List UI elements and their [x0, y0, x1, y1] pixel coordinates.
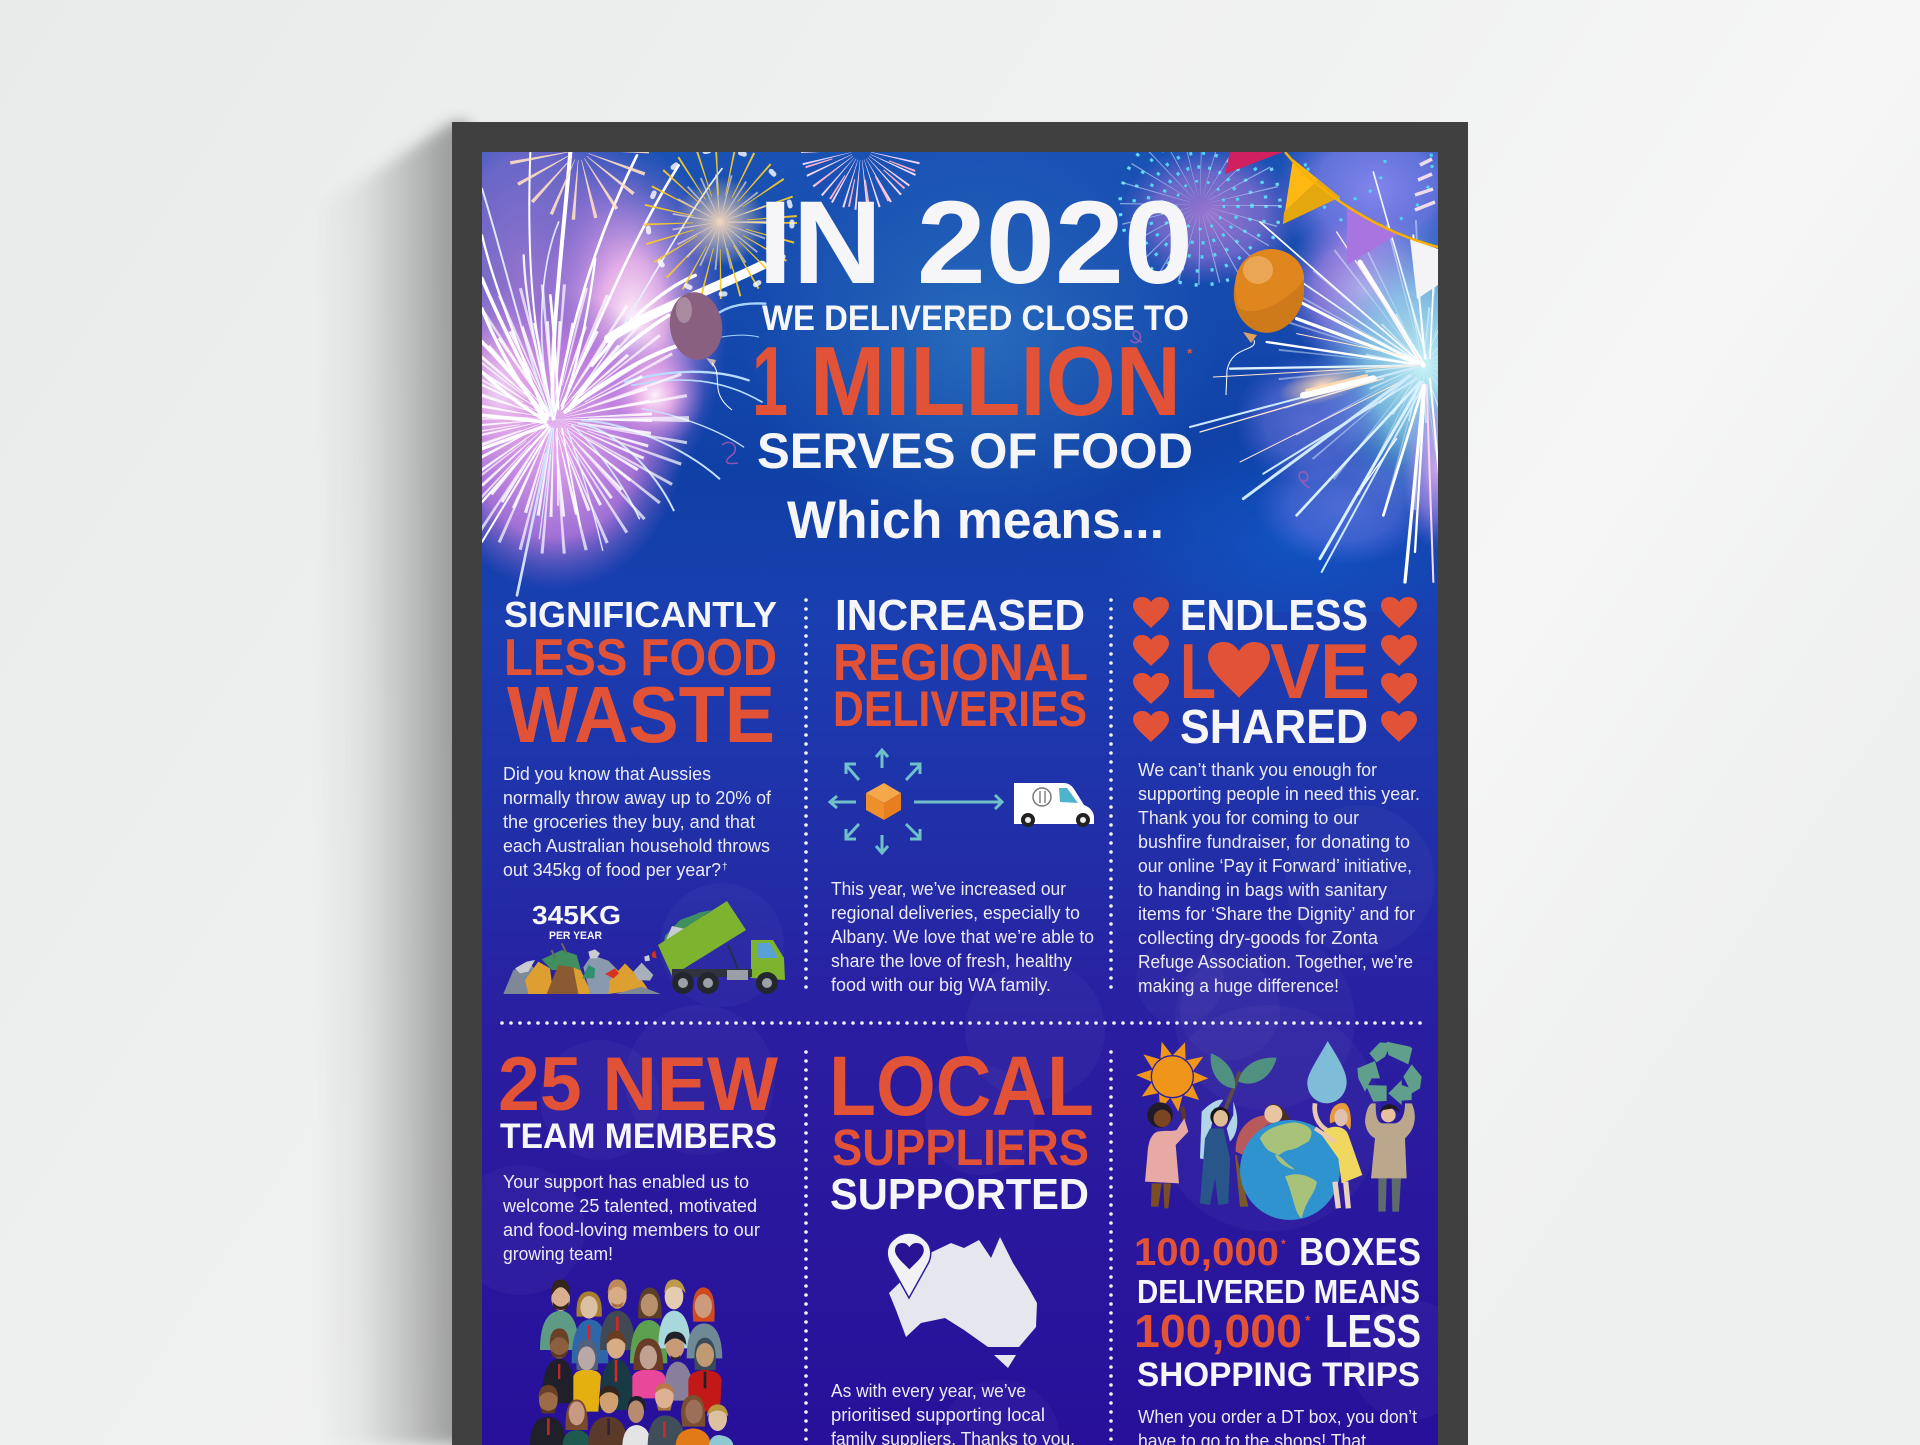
front row of people	[530, 1383, 733, 1445]
firework: cyan dotted burst	[1118, 152, 1294, 287]
heading: 100,000 less: *	[1305, 1312, 1311, 1328]
firework: top left sparkles	[539, 110, 619, 190]
heading: Less food: LESS FOOD	[504, 629, 777, 687]
body text: normally throw away up to 20% of	[503, 788, 772, 808]
body text: and food-loving members to our	[503, 1220, 760, 1240]
heading: Waste: WASTE	[507, 670, 775, 759]
firework: gold burst	[648, 150, 792, 294]
firework: small top burst	[801, 152, 920, 210]
body text	[503, 764, 772, 880]
body text: regional deliveries, especially to	[831, 903, 1080, 923]
heading: 100,000 boxes: 100,000	[1134, 1231, 1279, 1274]
body text: out 345kg of food per year?	[503, 860, 721, 880]
illustration: crowd of people	[530, 1279, 733, 1445]
body text: the groceries they buy, and that	[503, 812, 755, 832]
icon: map pin with heart	[887, 1233, 931, 1298]
person in pink dress	[1145, 1102, 1188, 1208]
soft circle behind illustration	[1155, 1005, 1382, 1232]
heading: Significantly: SIGNIFICANTLY	[504, 594, 777, 635]
body text: As with every year, we’ve	[831, 1381, 1026, 1401]
heading: 100,000 boxes	[1134, 1231, 1421, 1274]
subtitle: Which means: Which means...	[787, 491, 1164, 550]
icon: sun	[1136, 1042, 1208, 1112]
body text: When you order a DT box, you don’t	[1138, 1407, 1417, 1427]
title: In 2020: IN 2020	[758, 177, 1193, 309]
heading: Delivered means: DELIVERED MEANS	[1137, 1273, 1420, 1310]
icon: box with distribution arrows	[830, 750, 1002, 853]
body text: prioritised supporting local	[831, 1405, 1045, 1425]
panel: local suppliers supported	[829, 1039, 1094, 1445]
icon: waste pile	[503, 943, 661, 994]
heading: Team members: TEAM MEMBERS	[500, 1117, 777, 1156]
central blue glow	[800, 197, 1160, 496]
body text: We can’t thank you enough for	[1138, 760, 1377, 780]
icon: water drop	[1307, 1041, 1347, 1103]
body text: collecting dry-goods for Zonta	[1138, 928, 1379, 948]
heading: 100,000 less	[1134, 1305, 1421, 1357]
body text: Refuge Association. Together, we’re	[1138, 952, 1413, 972]
globe	[1240, 1120, 1340, 1220]
panel: new team members	[498, 1042, 778, 1445]
confetti swirls	[722, 331, 1310, 488]
body text	[1138, 1407, 1417, 1445]
body text: bushfire fundraiser, for donating to	[1138, 832, 1410, 852]
back row of people	[540, 1279, 722, 1363]
body text: Did you know that Aussies	[503, 764, 711, 784]
heading: Shopping trips: SHOPPING TRIPS	[1137, 1356, 1420, 1394]
heading: 100,000 boxes: BOXES	[1299, 1231, 1421, 1274]
long upward rays	[482, 152, 765, 595]
person in overalls	[1200, 1100, 1237, 1205]
heading: 100,000 less: 100,000	[1134, 1305, 1302, 1357]
bunting flags	[1225, 152, 1438, 299]
body text: Albany. We love that we’re able to	[831, 927, 1094, 947]
body text	[502, 1172, 760, 1264]
poster frame	[452, 122, 1468, 1445]
person in yellow dress	[1315, 1103, 1362, 1208]
body text	[1138, 760, 1420, 996]
body text: food with our big WA family.	[831, 975, 1051, 995]
heading: Local: LOCAL	[829, 1039, 1094, 1133]
body text: growing team!	[503, 1244, 613, 1264]
panel: less food waste	[503, 594, 785, 994]
icon: plant leaves	[1211, 1053, 1277, 1110]
body text: our online ‘Pay it Forward’ initiative,	[1138, 856, 1412, 876]
body text: share the love of fresh, healthy	[831, 951, 1072, 971]
icon: Tasmania	[994, 1355, 1016, 1368]
panel: endless love shared	[1133, 591, 1420, 996]
body text	[831, 879, 1094, 995]
firework: top right periwinkle glow with dots	[1280, 152, 1438, 361]
asterisk: *	[1187, 345, 1193, 361]
icon: delivery van	[1014, 783, 1094, 827]
column dividers	[502, 600, 1424, 1445]
body text: Thank you for coming to our	[1138, 808, 1359, 828]
heading: Love with heart	[1180, 627, 1370, 715]
body text: Your support has enabled us to	[503, 1172, 749, 1192]
panel: regional deliveries	[830, 591, 1094, 995]
heading: Supported: SUPPORTED	[830, 1170, 1089, 1219]
body text: welcome 25 talented, motivated	[502, 1196, 757, 1216]
heading: 100,000 less: LESS	[1325, 1305, 1421, 1357]
body text: †	[722, 862, 728, 873]
illustration: people and earth	[1136, 1005, 1422, 1232]
icon: recycling arrows	[1357, 1042, 1422, 1105]
stat caption: per year: PER YEAR	[549, 930, 602, 942]
body text	[831, 1381, 1075, 1445]
middle row of people	[542, 1328, 722, 1412]
body text: to handing in bags with sanitary	[1138, 880, 1387, 900]
icon: dump truck	[658, 901, 785, 994]
header fireworks	[482, 152, 1438, 606]
bokeh background circles	[625, 948, 1280, 1134]
heading: 100,000 boxes: *	[1281, 1237, 1286, 1251]
poster background	[482, 152, 1438, 1445]
firework: large cyan burst right	[1189, 171, 1438, 584]
headline: 1 million: 1	[752, 326, 788, 436]
heading: Love with heart: VE	[1270, 627, 1370, 715]
heading: Deliveries: DELIVERIES	[833, 681, 1087, 737]
icon: hearts left and right	[1133, 597, 1417, 742]
frame shadow	[310, 122, 470, 1445]
body text: each Australian household throws	[503, 836, 770, 856]
body text: items for ‘Share the Dignity’ and for	[1138, 904, 1415, 924]
heading: 25 new: 25 NEW	[498, 1042, 778, 1127]
body text: This year, we’ve increased our	[831, 879, 1066, 899]
heading: Endless: ENDLESS	[1180, 591, 1368, 640]
heading: Love with heart: L	[1180, 627, 1216, 715]
subtitle: We delivered close to: WE DELIVERED CLOSE TO	[762, 299, 1189, 338]
person in tan coat	[1365, 1103, 1415, 1212]
balloon: purple	[666, 289, 732, 410]
heading: Regional: REGIONAL	[833, 634, 1088, 692]
heading: Shared: SHARED	[1180, 701, 1368, 754]
heading: Suppliers: SUPPLIERS	[832, 1119, 1089, 1176]
heading: Increased: INCREASED	[835, 591, 1085, 640]
firework: large pink burst left	[482, 152, 766, 597]
subtitle: Serves of food: SERVES OF FOOD	[757, 423, 1193, 479]
stat: 345kg: 345KG	[532, 900, 621, 930]
icon: Australia map	[889, 1237, 1037, 1347]
headline: 1 million: MILLION	[810, 326, 1181, 436]
balloon: orange	[1226, 249, 1304, 395]
body text: making a huge difference!	[1138, 976, 1339, 996]
body text: supporting people in need this year.	[1138, 784, 1420, 804]
person leaning on globe	[1235, 1104, 1290, 1207]
panel: fewer shopping trips	[1134, 1005, 1422, 1445]
